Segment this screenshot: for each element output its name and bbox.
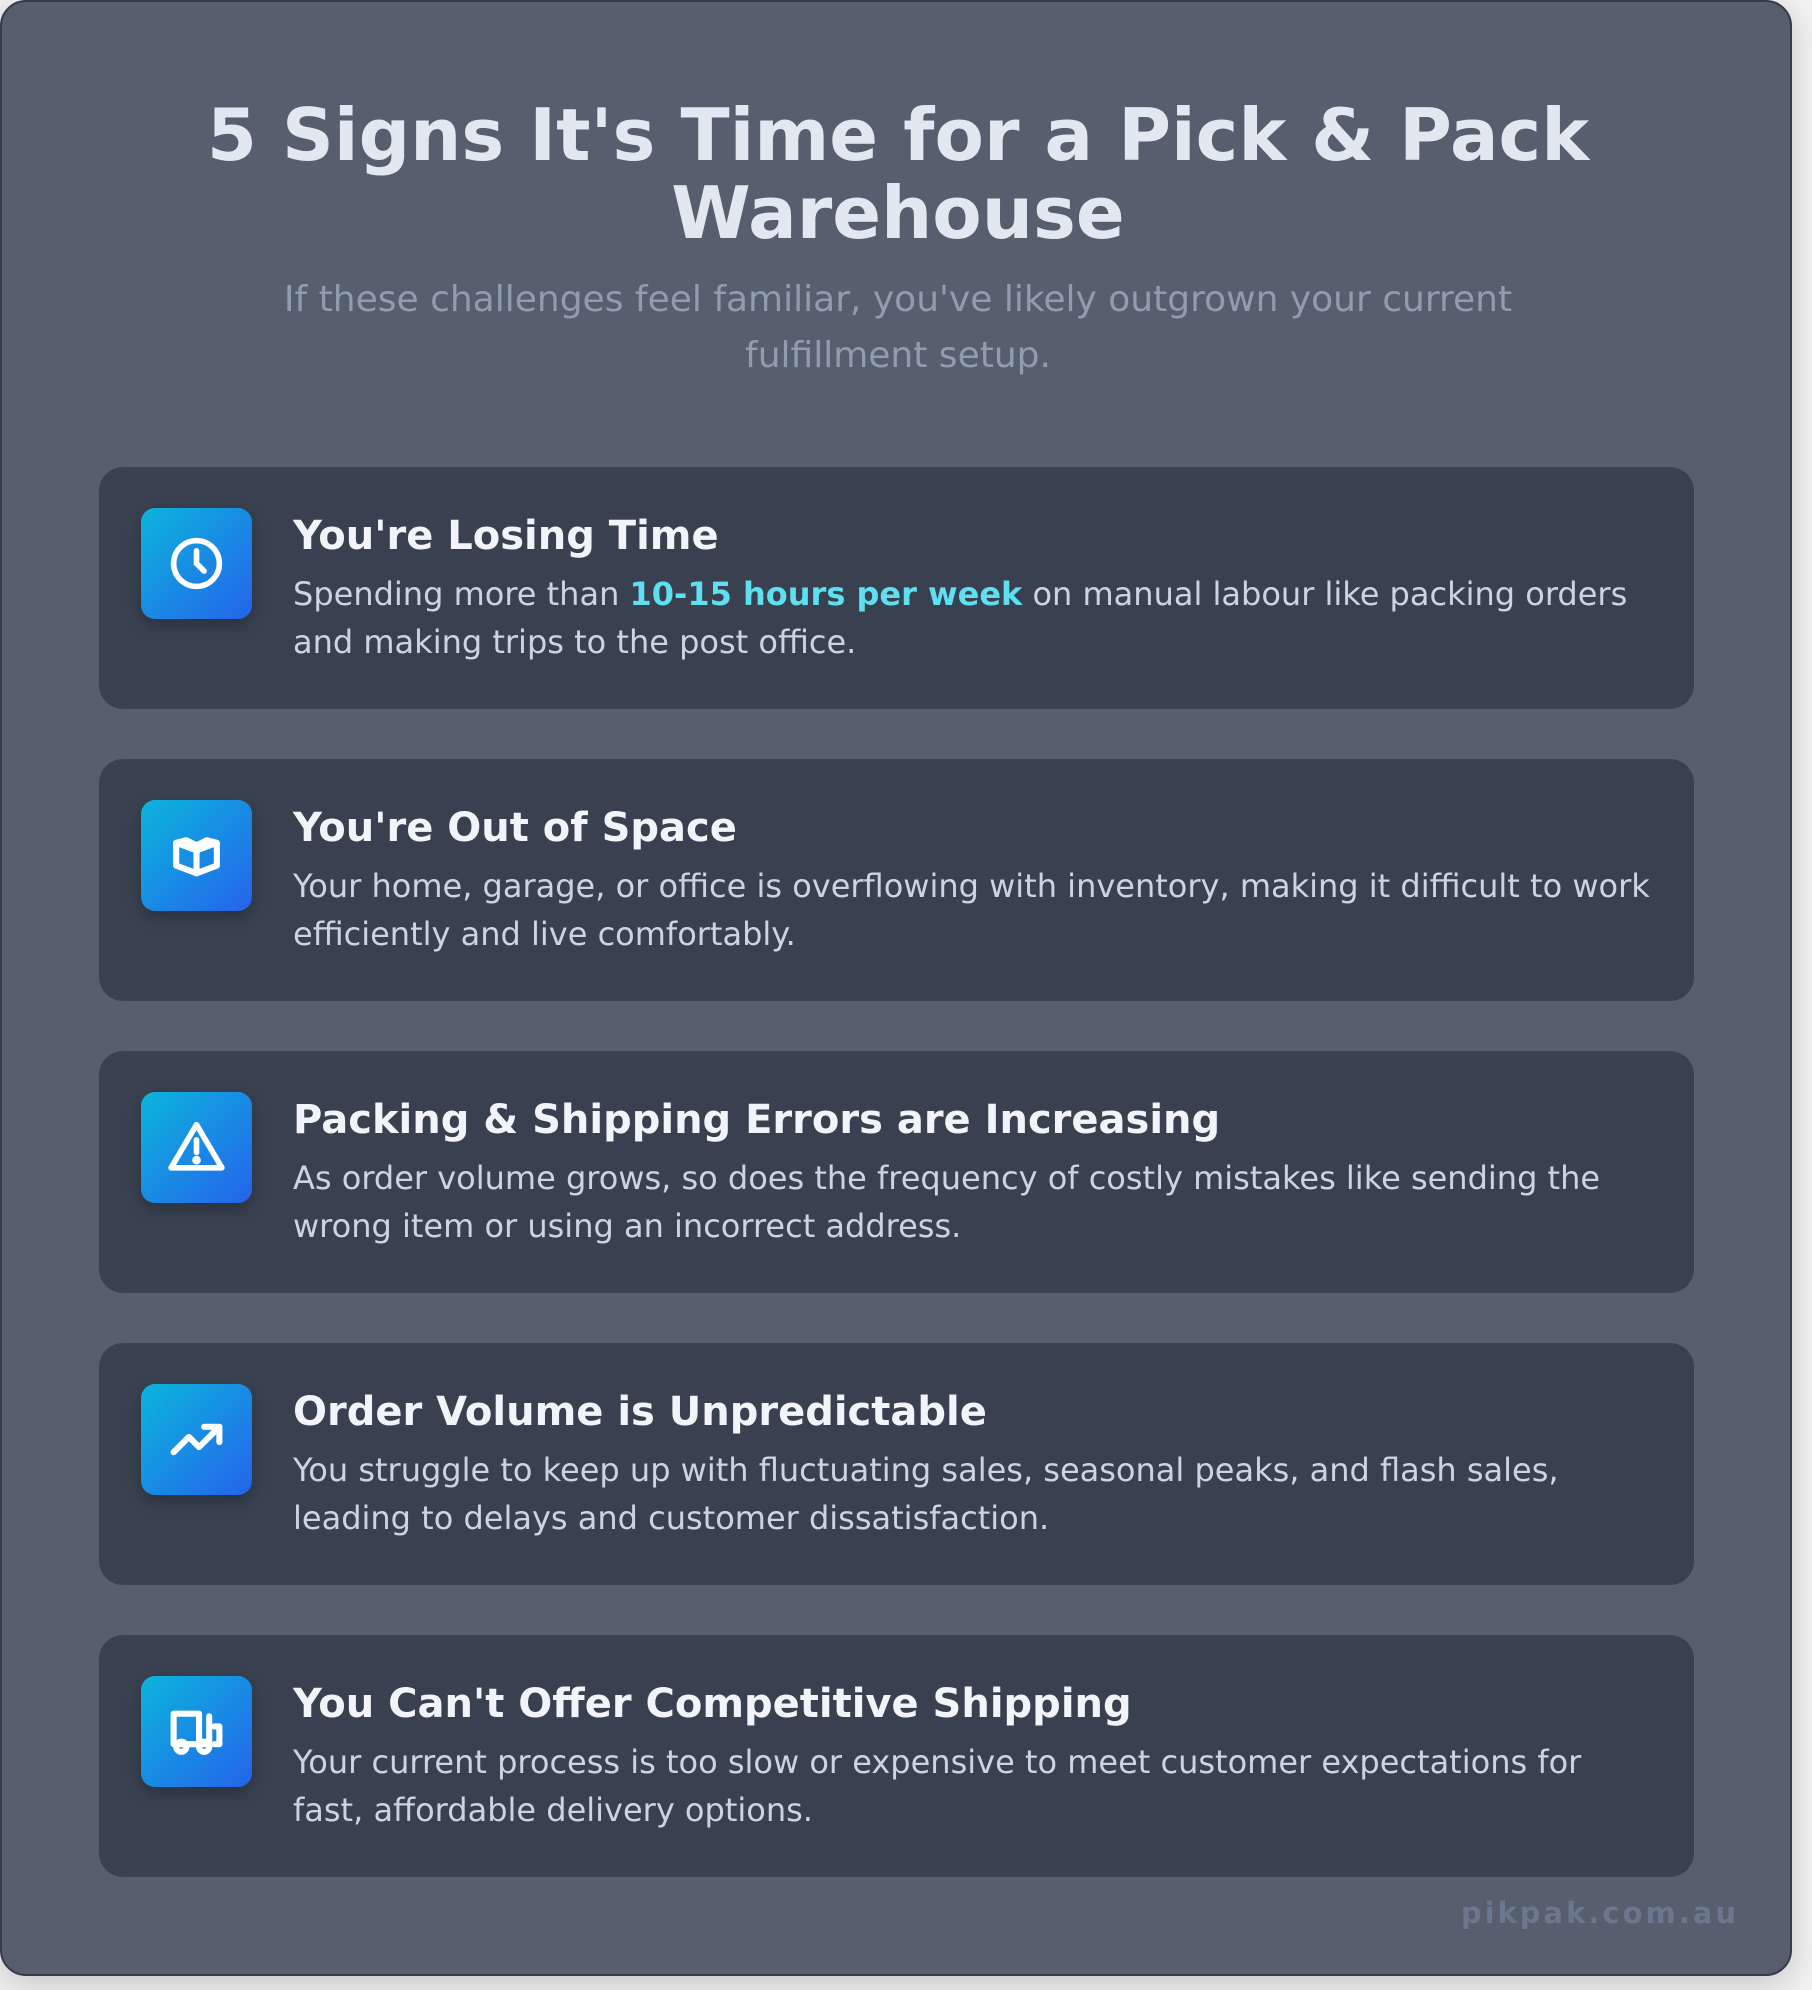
heading: Order Volume is Unpredictable bbox=[293, 1389, 987, 1435]
heading: You Can't Offer Competitive Shipping bbox=[293, 1681, 1132, 1727]
description: Spending more than 10-15 hours per week on manual labour like packing orders bbox=[293, 575, 1627, 613]
description: wrong item or using an incorrect address. bbox=[293, 1207, 961, 1245]
card: shipping bbox=[99, 1635, 1694, 1877]
card: out of space bbox=[99, 759, 1694, 1001]
heading: You're Losing Time bbox=[293, 513, 719, 559]
icon: box bbox=[141, 800, 252, 911]
icon: clock bbox=[141, 508, 252, 619]
subtitle: fulfillment setup. bbox=[745, 335, 1051, 376]
description bbox=[293, 867, 1650, 953]
subtitle: If these challenges feel familiar, you've likely outgrown your current bbox=[284, 279, 1512, 320]
title bbox=[207, 93, 1590, 255]
heading: Packing & Shipping Errors are Increasing bbox=[293, 1097, 1220, 1143]
icon: warning bbox=[141, 1092, 252, 1203]
title: Warehouse bbox=[671, 171, 1125, 255]
description: fast, affordable delivery options. bbox=[293, 1791, 813, 1829]
description: You struggle to keep up with fluctuating sales, seasonal peaks, and flash sales, bbox=[293, 1451, 1559, 1489]
description bbox=[293, 1451, 1559, 1537]
description: Your current process is too slow or expensive to meet customer expectations for bbox=[293, 1743, 1581, 1781]
description: efficiently and live comfortably. bbox=[293, 915, 796, 953]
description: Your home, garage, or office is overflowing with inventory, making it difficult to work bbox=[293, 867, 1650, 905]
subtitle bbox=[284, 279, 1512, 376]
card: volume bbox=[99, 1343, 1694, 1585]
watermark: pikpak.com.au bbox=[1461, 1896, 1739, 1930]
icon: truck bbox=[141, 1676, 252, 1787]
description: leading to delays and customer dissatisfaction. bbox=[293, 1499, 1049, 1537]
heading: You're Out of Space bbox=[293, 805, 737, 851]
title: 5 Signs It's Time for a Pick & Pack bbox=[207, 93, 1589, 177]
description: As order volume grows, so does the frequency of costly mistakes like sending the bbox=[293, 1159, 1600, 1197]
card: errors bbox=[99, 1051, 1694, 1293]
description bbox=[293, 575, 1627, 661]
description: and making trips to the post office. bbox=[293, 623, 856, 661]
icon: trending up bbox=[141, 1384, 252, 1495]
description bbox=[293, 1159, 1600, 1245]
description bbox=[293, 1743, 1582, 1829]
card: losing time bbox=[99, 467, 1694, 709]
